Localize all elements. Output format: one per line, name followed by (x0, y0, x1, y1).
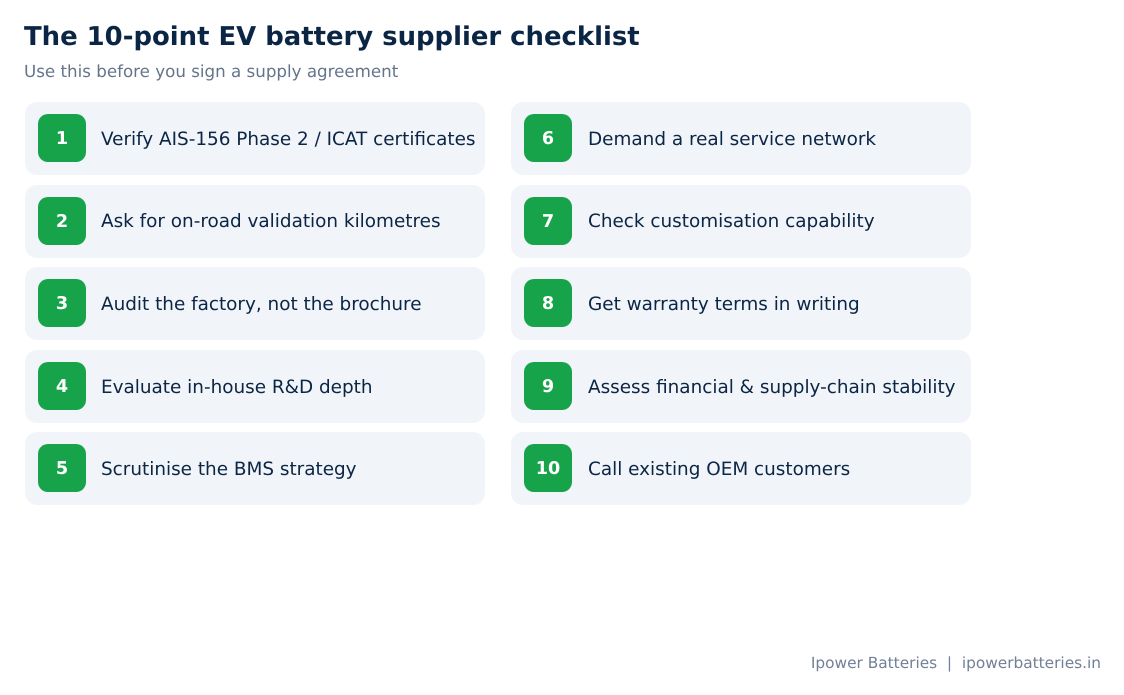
panel: item 8: 8 (542, 294, 554, 314)
panel: item 3 (24, 267, 484, 340)
panel: item 10: Call existing OEM customers (588, 459, 850, 480)
panel: item 9: 9 (542, 377, 554, 397)
panel: item 1 (24, 102, 484, 175)
panel: item 6: Demand a real service network (588, 129, 876, 150)
panel: item 7: 7 (542, 212, 554, 232)
panel: item 6: 6 (542, 129, 554, 149)
panel: item 6 (510, 102, 970, 175)
panel: item 3: Audit the factory, not the brochure (101, 294, 422, 315)
subtitle: Use this before you sign a supply agreement (24, 61, 398, 81)
panel: item 1: Verify AIS-156 Phase 2 / ICAT certificates (101, 129, 476, 150)
panel: item 5: Scrutinise the BMS strategy (101, 459, 357, 480)
panel: item 5: 5 (56, 459, 68, 479)
panel: item 4: 4 (56, 377, 68, 397)
panel: item 10 (510, 432, 970, 505)
footer credit: Ipower Batteries | ipowerbatteries.in (811, 654, 1101, 672)
panel: item 7: Check customisation capability (588, 211, 875, 232)
panel: item 9: Assess financial & supply-chain stability (588, 377, 956, 398)
panel: item 10: 10 (536, 459, 560, 479)
panel: item 2: Ask for on-road validation kilometres (101, 211, 441, 232)
panel: item 5 (24, 432, 484, 505)
panel: item 8: Get warranty terms in writing (588, 294, 860, 315)
panel: item 8 (510, 267, 970, 340)
panel: item 7 (510, 185, 970, 258)
panel: item 2 (24, 185, 484, 258)
title: The 10-point EV battery supplier checklist (24, 22, 640, 52)
panel: item 1: 1 (56, 129, 68, 149)
panel: item 4 (24, 350, 484, 423)
panel: item 4: Evaluate in-house R&D depth (101, 377, 373, 398)
panel: item 2: 2 (56, 212, 68, 232)
panel: item 9 (510, 350, 970, 423)
panel: item 3: 3 (56, 294, 68, 314)
